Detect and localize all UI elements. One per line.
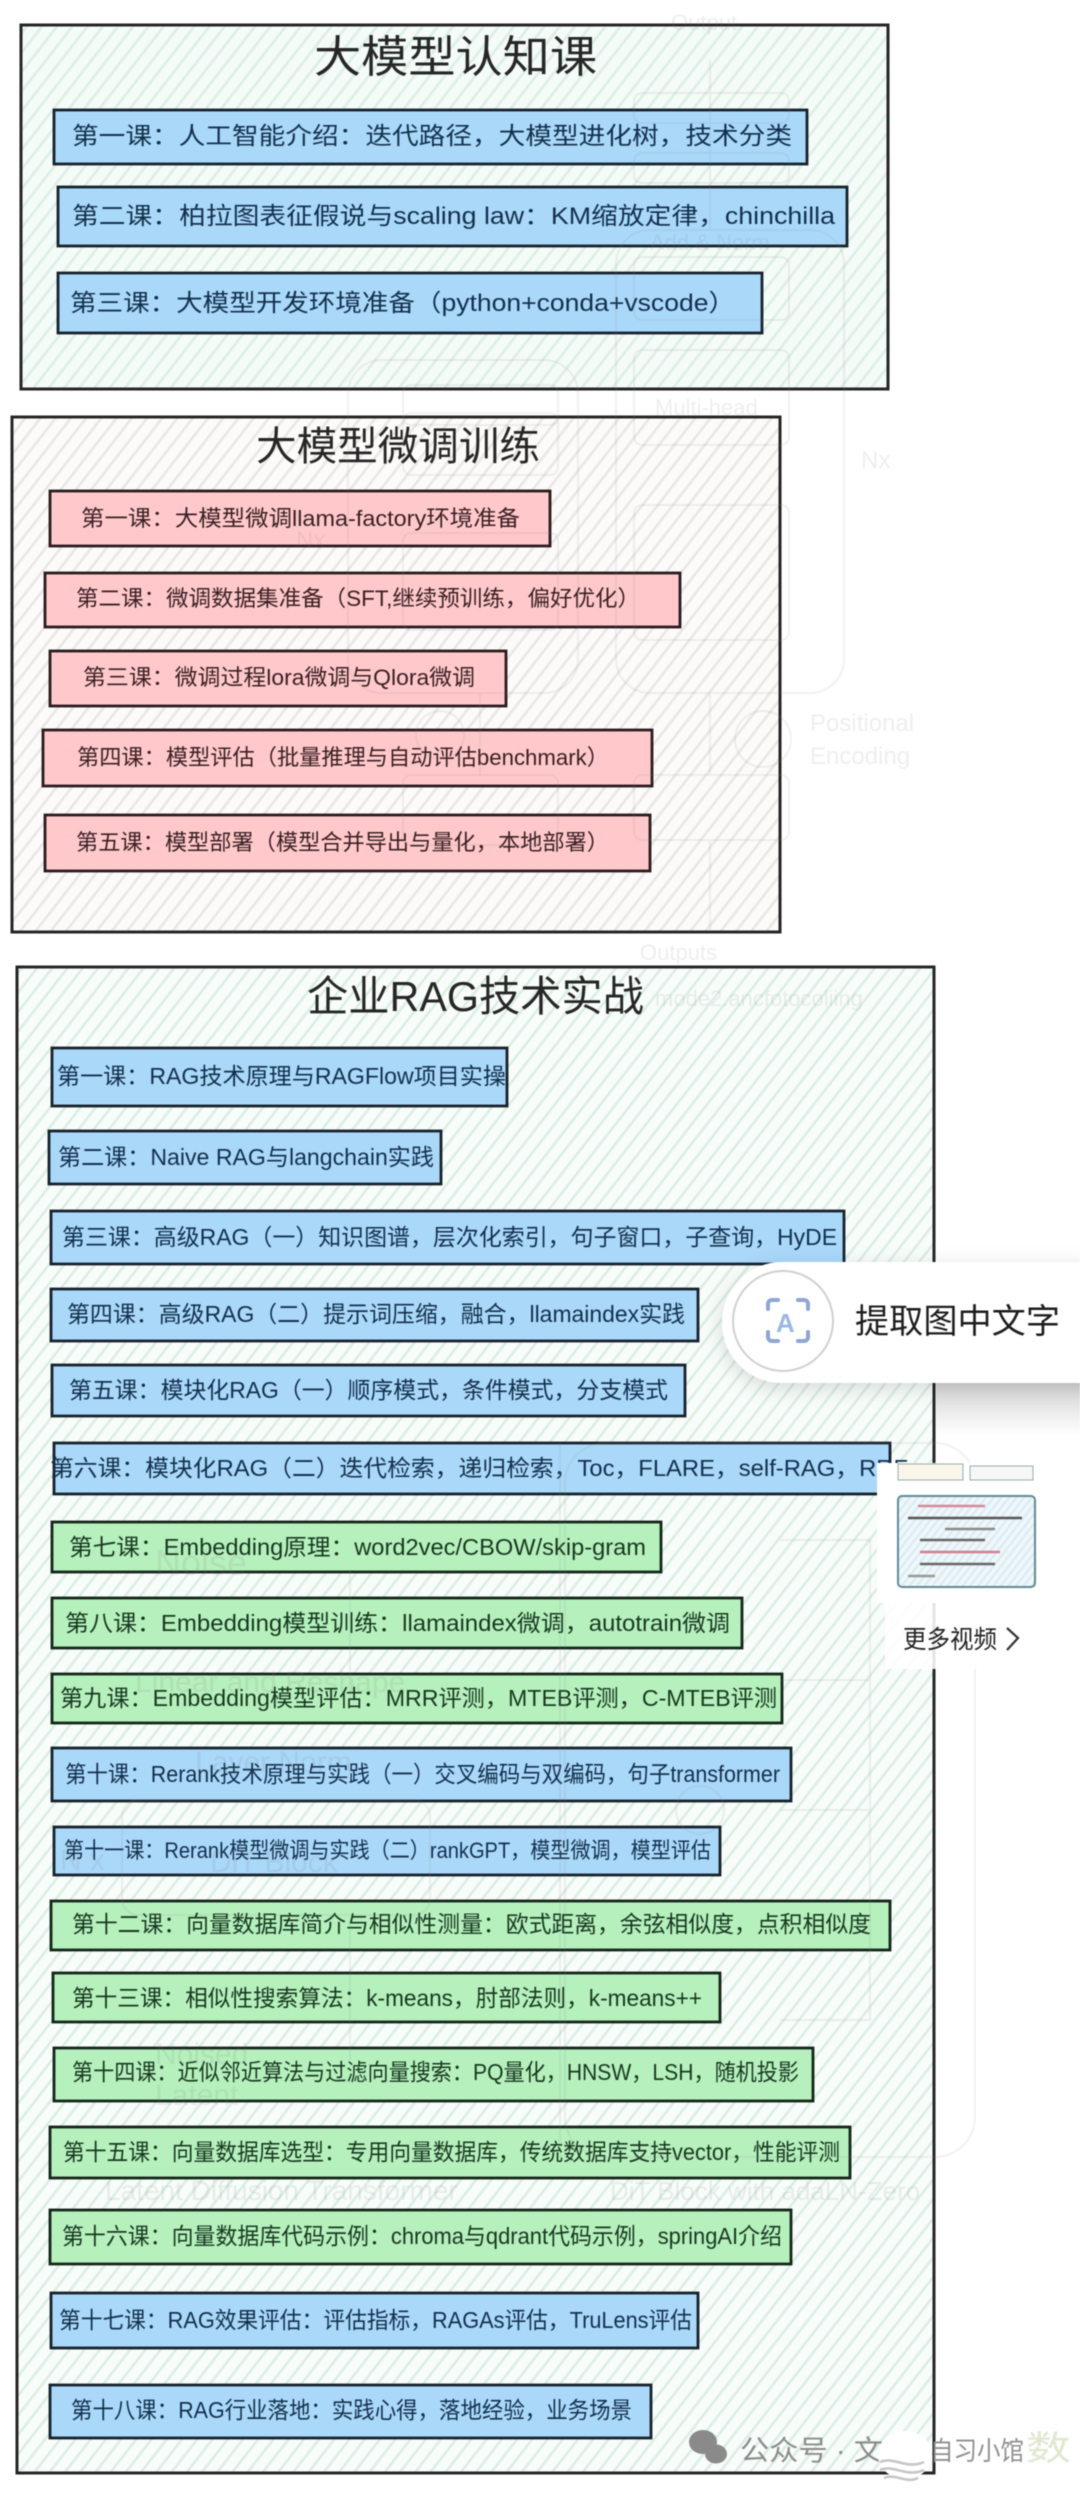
lesson 3 <box>58 273 762 333</box>
faint background architecture diagram: DiT Block with adaLN-Zero <box>610 2176 920 2206</box>
lesson 16 <box>50 2210 791 2264</box>
lesson 15 <box>50 2127 850 2178</box>
lesson 11: 第十一课：Rerank模型微调与实践（二）rankGPT，模型微调，模型评估 <box>64 1838 711 1863</box>
faint background architecture diagram: Multi-head <box>655 395 758 420</box>
lesson 3: 第三课：大模型开发环境准备（python+conda+vscode） <box>70 290 735 317</box>
lesson 4: 第四课：模型评估（批量推理与自动评估benchmark） <box>77 745 609 770</box>
lesson 14: 第十四课：近似邻近算法与过滤向量搜索：PQ量化，HNSW，LSH，随机投影 <box>72 2059 799 2085</box>
lesson 17: 第十七课：RAG效果评估：评估指标，RAGAs评估，TruLens评估 <box>59 2307 692 2333</box>
faint background architecture diagram: Add & Norm <box>650 230 770 255</box>
lesson 4 <box>43 730 652 786</box>
faint background architecture diagram: Outputs <box>640 940 717 965</box>
faint background architecture diagram: Linear and Reshape <box>135 1666 405 1699</box>
lesson 5 <box>45 815 650 871</box>
lesson 2 <box>58 187 847 246</box>
lesson 13: 第十三课：相似性搜索算法：k-means，肘部法则，k-means++ <box>72 1985 702 2011</box>
lesson 12 <box>51 1901 890 1950</box>
watermark <box>689 2430 1071 2480</box>
thumbnail: mini infographic <box>898 1464 1035 1587</box>
icon: text recognition <box>768 1300 808 1341</box>
link: 更多视频: 更多视频 <box>903 1626 997 1654</box>
lesson 15: 第十五课：向量数据库选型：专用向量数据库，传统数据库支持vector，性能评测 <box>63 2139 840 2165</box>
shadow under popup <box>936 1383 1080 1435</box>
lesson 5: 第五课：模块化RAG（一）顺序模式，条件模式，分支模式 <box>69 1377 668 1403</box>
lesson 7 <box>52 1522 661 1572</box>
lesson 6: 第六课：模块化RAG（二）迭代检索，递归检索，Toc，FLARE，self-RAG，RRF <box>50 1455 908 1481</box>
panel: 大模型认知课 <box>21 25 888 389</box>
lesson 11 <box>54 1827 720 1875</box>
lesson 2: 第二课：Naive RAG与langchain实践 <box>58 1144 434 1170</box>
faint background architecture diagram: Encoding <box>810 743 910 770</box>
icon: text recognition: A <box>776 1308 795 1338</box>
lesson 1 <box>50 491 550 546</box>
faint background architecture diagram: Latent Diffusion Transformer <box>105 2175 458 2206</box>
lesson 9 <box>52 1674 782 1723</box>
lesson 3 <box>51 1211 844 1264</box>
lesson 5: 第五课：模型部署（模型合并导出与量化，本地部署） <box>76 830 609 855</box>
heading: 企业RAG技术实战: 企业RAG技术实战 <box>307 973 644 1020</box>
panel: 大模型微调训练 <box>12 417 780 932</box>
lesson 10: 第十课：Rerank技术原理与实践（一）交叉编码与双编码，句子transformer <box>65 1761 780 1787</box>
faint background architecture diagram <box>60 10 975 2206</box>
heading: 大模型认知课: 大模型认知课 <box>314 33 597 82</box>
lesson 1 <box>54 110 807 164</box>
watermark: 自习小馆 <box>930 2436 1024 2466</box>
lesson 16: 第十六课：向量数据库代码示例：chroma与qdrant代码示例，springAI介绍 <box>62 2223 782 2249</box>
icon: wechat <box>689 2430 727 2464</box>
faint background architecture diagram: Nx <box>296 527 325 554</box>
panel: 企业RAG技术实战 <box>17 967 934 2473</box>
faint background architecture diagram: Noised <box>155 2038 248 2071</box>
lesson 7: 第七课：Embedding原理：word2vec/CBOW/skip-gram <box>69 1534 646 1560</box>
lesson 18 <box>50 2385 651 2438</box>
heading: 大模型微调训练: 大模型微调训练 <box>256 425 540 469</box>
lesson 3: 第三课：微调过程lora微调与Qlora微调 <box>83 665 475 690</box>
lesson 3 <box>50 651 506 706</box>
faint background architecture diagram: Nx <box>861 447 890 474</box>
faint background architecture diagram: Latent <box>155 2079 239 2112</box>
popup label: 提取图中文字 <box>855 1303 1060 1341</box>
faint background architecture diagram: Output <box>671 10 737 35</box>
popup: 提取图中文字 <box>722 1262 1080 1383</box>
lesson 2: 第二课：微调数据集准备（SFT,继续预训练，偏好优化） <box>76 586 640 611</box>
lesson 13 <box>53 1973 720 2022</box>
video thumbnail panel <box>877 1463 1040 1669</box>
lesson 14 <box>54 2048 813 2101</box>
lesson 2: 第二课：柏拉图表征假说与scaling law：KM缩放定律，chinchilla <box>72 203 836 230</box>
watermark: 公众号 · 文 <box>740 2435 883 2466</box>
icon: cloud wave logo <box>878 2431 932 2480</box>
lesson 5 <box>52 1365 685 1416</box>
lesson 1 <box>52 1048 507 1106</box>
lesson 1: 第一课：人工智能介绍：迭代路径，大模型进化树，技术分类 <box>72 123 792 150</box>
lesson 2 <box>45 573 680 627</box>
lesson 8 <box>52 1598 742 1648</box>
faint background architecture diagram: Layer Norm <box>195 1746 352 1779</box>
lesson 10 <box>52 1748 791 1801</box>
faint background architecture diagram: mode2.ancfotocoliing <box>655 986 863 1011</box>
lesson 4: 第四课：高级RAG（二）提示词压缩，融合，llamaindex实践 <box>67 1301 685 1327</box>
lesson 1: 第一课：大模型微调llama-factory环境准备 <box>81 506 520 531</box>
faint background architecture diagram: Noise <box>155 1542 247 1583</box>
faint background architecture diagram: Positional <box>810 710 914 737</box>
lesson 4 <box>51 1289 698 1341</box>
lesson 8: 第八课：Embedding模型训练：llamaindex微调，autotrain微调 <box>65 1610 730 1636</box>
watermark: 数 <box>1026 2430 1071 2468</box>
lesson 3: 第三课：高级RAG（一）知识图谱，层次化索引，句子窗口，子查询，HyDE <box>62 1224 837 1250</box>
lesson 1: 第一课：RAG技术原理与RAGFlow项目实操 <box>57 1063 506 1089</box>
lesson 12: 第十二课：向量数据库简介与相似性测量：欧式距离，余弦相似度，点积相似度 <box>72 1911 871 1937</box>
faint background architecture diagram: DiT Block <box>210 1846 339 1879</box>
lesson 2 <box>49 1131 441 1184</box>
lesson 9: 第九课：Embedding模型评估：MRR评测，MTEB评测，C-MTEB评测 <box>60 1685 777 1711</box>
lesson 17 <box>51 2293 698 2348</box>
lesson 6 <box>50 1443 908 1494</box>
lesson 18: 第十八课：RAG行业落地：实践心得，落地经验，业务场景 <box>71 2397 632 2423</box>
faint background architecture diagram: N x <box>60 1844 105 1877</box>
